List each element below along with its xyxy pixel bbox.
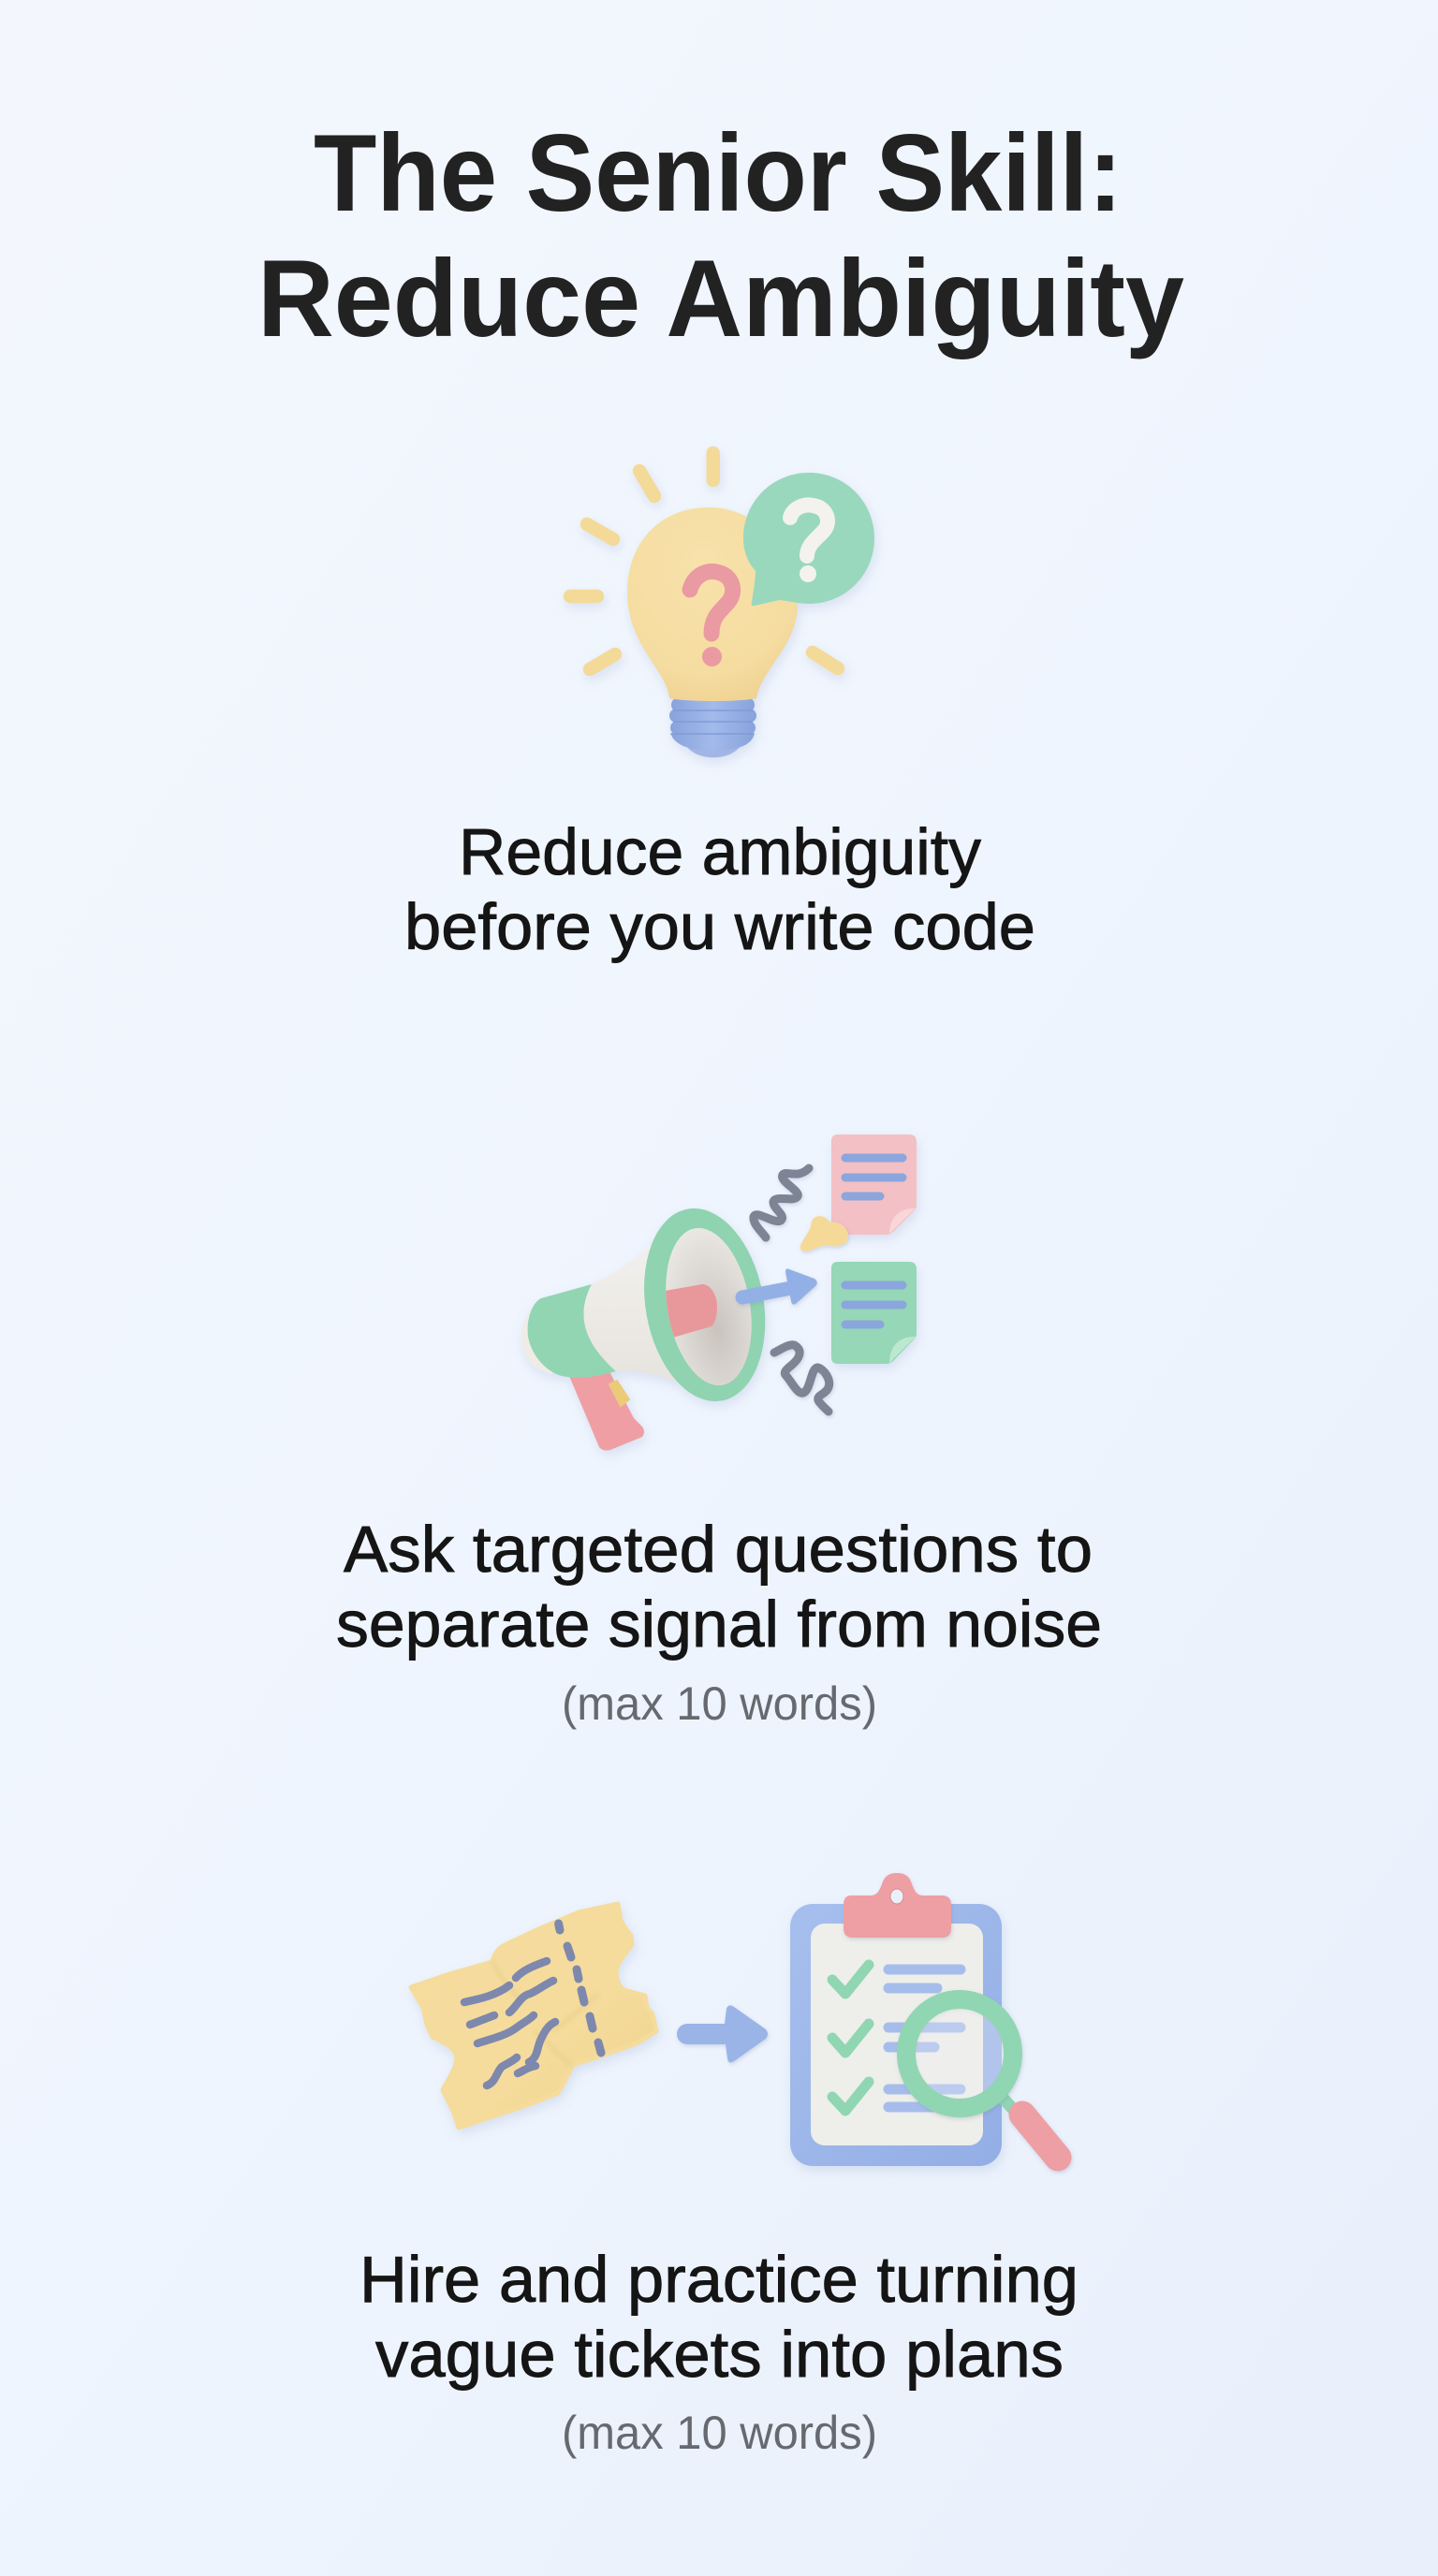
caption: tickets into plans: Hire and practice turning [360,2243,1078,2316]
checkmarks [832,1965,869,2111]
caption: targeted questions: separate signal from noise [336,1588,1102,1661]
panel: targeted questions [336,1134,1102,1730]
light rays [570,453,838,669]
clip hole [890,1889,903,1904]
green note [831,1262,917,1364]
green band [528,1284,616,1378]
caption: tickets into plans [360,2243,1078,2391]
caption: targeted questions: Ask targeted questions to [344,1513,1093,1586]
caption: reduce ambiguity: Reduce ambiguity [459,815,981,888]
icon: crumpled ticket [411,1904,656,2128]
yellow blob [800,1216,848,1251]
pink question mark [690,571,733,666]
rim [630,1199,780,1411]
bulb glass [627,507,798,701]
clip [844,1873,951,1938]
handle [565,1355,644,1451]
icon: clipboard with checklist [790,1873,1002,2166]
scribbled text lines [464,1961,555,2086]
bulb base [669,697,756,757]
arrow [677,2005,768,2062]
white question mark [790,505,828,582]
icon: light bulb with question marks [570,453,874,757]
panel: reduce ambiguity [404,453,1035,963]
caption: reduce ambiguity: before you write code [404,890,1035,963]
mouth [654,1222,763,1392]
board [790,1904,1002,2166]
note: word limit: (max 10 words) [562,1677,877,1730]
megaphone [521,1199,780,1451]
torn dashes [559,1924,601,2053]
caption: targeted questions [336,1513,1102,1661]
caption: tickets into plans: vague tickets into plans [375,2318,1064,2391]
pink note [831,1134,917,1235]
title: Reduce Ambiguity [257,237,1184,359]
icon: magnifying glass [906,1999,1058,2158]
trigger [609,1381,629,1406]
creases [492,1961,599,2066]
note: word limit: (max 10 words) [562,2407,877,2459]
caption: reduce ambiguity [404,815,1035,963]
ticket paper [411,1904,656,2128]
speech bubble [743,473,874,606]
cone [584,1245,702,1392]
icon: megaphone with notes [521,1134,917,1451]
back cap [521,1306,562,1374]
checklist lines [888,1969,961,2107]
noise squiggles [754,1168,829,1412]
title: The Senior Skill: [314,111,1123,234]
title [257,111,1184,359]
panel: vague tickets into plans [360,1873,1078,2459]
driver [666,1284,717,1337]
blue arrow [742,1268,817,1305]
paper [811,1924,983,2145]
